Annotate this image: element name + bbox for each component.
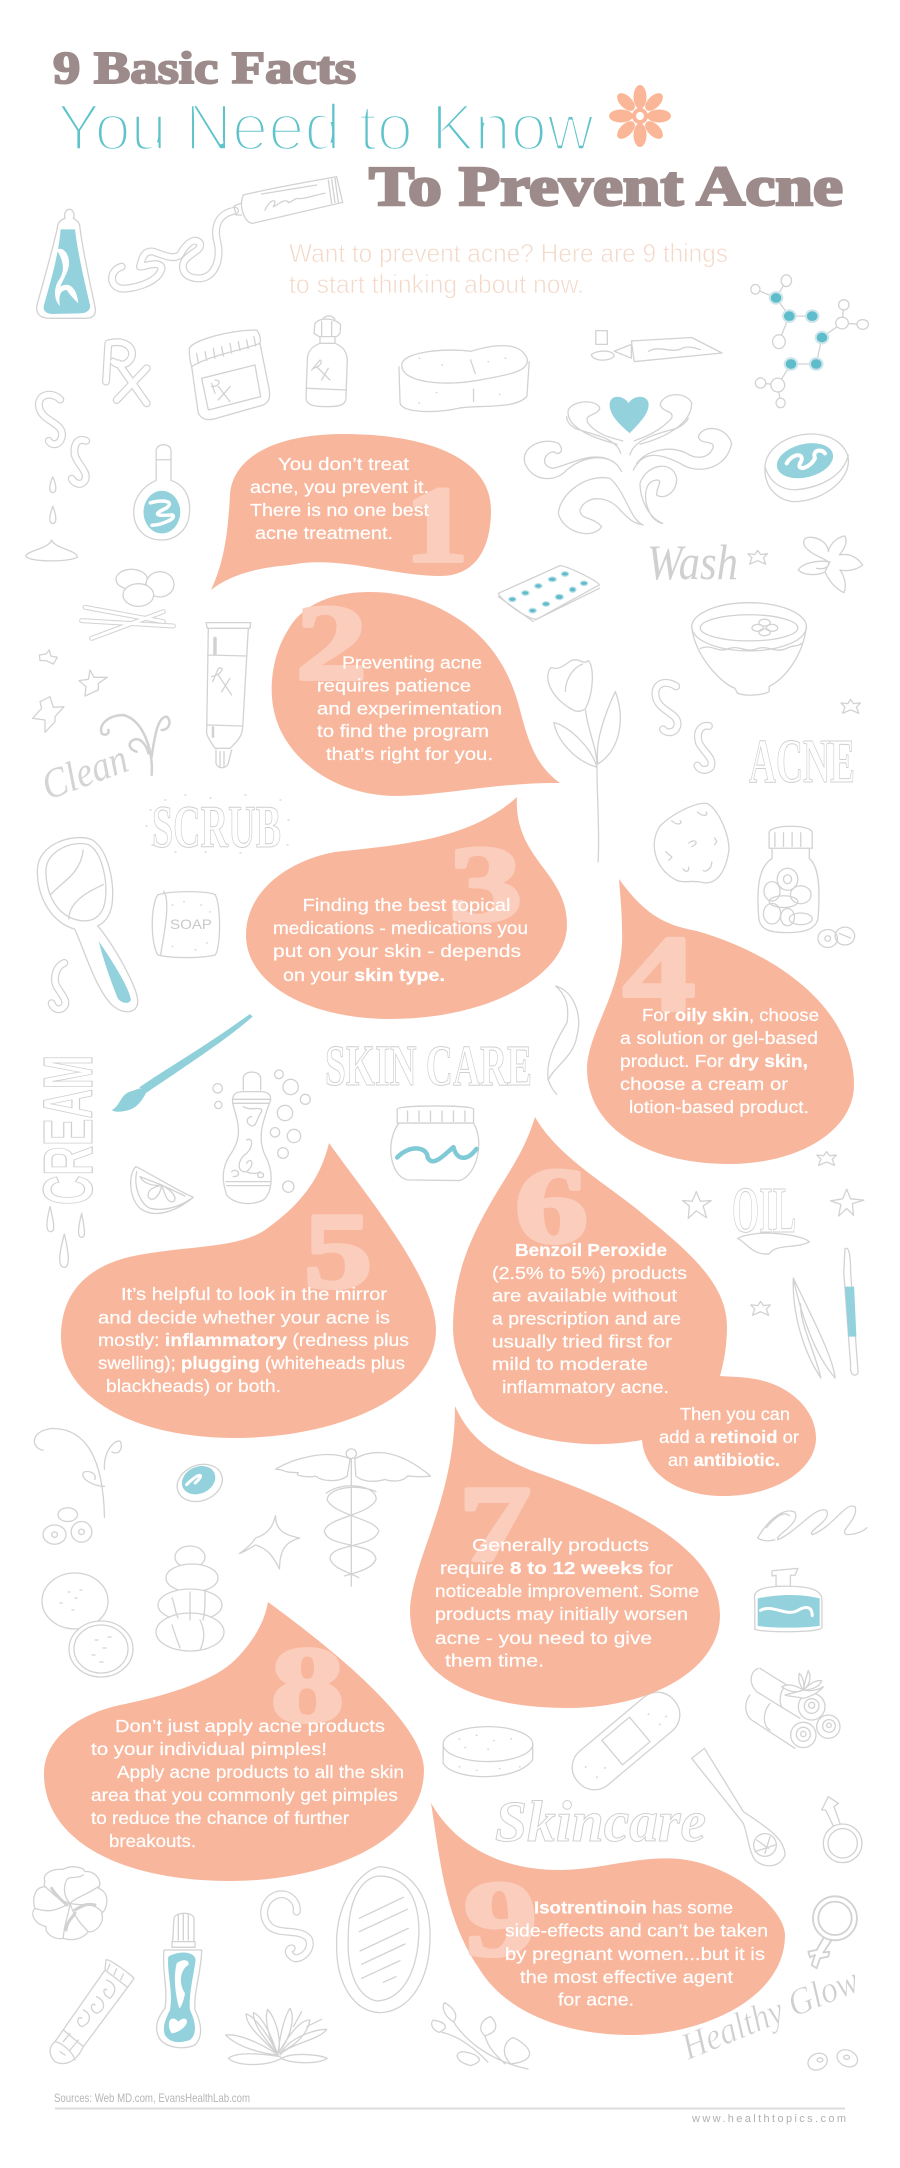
icon: right S letters [655,683,712,770]
icon: drip puddle [26,540,77,561]
bubble 8: to your individual pimples! [91,1739,327,1759]
bubble 6: usually tried first for [492,1332,672,1352]
bubble 2: that’s right for you. [326,744,493,764]
bubble 5: mostly: inflammatory (redness plus [98,1330,409,1350]
icon: squeezed tube [112,177,343,289]
icon: male symbol [822,1797,862,1863]
bubble 7: require 8 to 12 weeks for [440,1558,673,1578]
icon: small tube [591,331,722,362]
bubble 2: Preventing acne [342,652,482,672]
bubble 3: put on your skin - depends [273,941,521,961]
bubble 7: products may initially worsen [435,1604,688,1624]
bubble 6: are available without [492,1286,677,1306]
bubble 7: them time. [445,1650,544,1670]
icon: dropper bottle [213,1070,310,1204]
bubble 2: 2 [296,584,367,703]
icon: cucumber slices [42,1573,133,1677]
bubble 6: mild to moderate [492,1354,648,1374]
icon: orchid [798,536,863,593]
icon: potion bottle [134,445,190,540]
bubble 4 [587,879,854,1164]
intro text: to start thinking about now. [289,269,584,299]
icon: blue soap [765,434,848,502]
icon: cotton balls [116,569,174,606]
bubble 4: lotion-based product. [629,1097,809,1117]
bubble 1: acne treatment. [255,523,393,543]
icon: caduceus [276,1449,430,1586]
icon: SCRUB word: SCRUB [152,794,281,860]
bubble 9: Isotrentinoin has some [534,1898,733,1918]
icon: soap bar: SOAP [170,916,212,932]
icon: sponge [399,346,529,412]
bubble 8 [44,1602,424,1881]
icon: lower left S [52,963,65,1009]
bubble 2 [272,584,560,796]
icon: leaf [548,986,579,1094]
icon: Healthy Glow word: Healthy Glow [675,1959,865,2069]
bubble 1: acne, you prevent it. [250,477,429,497]
icon: molecule [751,275,868,408]
icon: rosette [33,1867,107,1940]
bubble 6: Benzoil Peroxide [515,1240,667,1260]
icon: blue paintbrush [112,1014,253,1112]
icon: blister pack [498,566,599,622]
bubble 5: It’s helpful to look in the mirror [121,1284,387,1304]
bubble 3: Finding the best topical [302,895,510,915]
bubble 5: 5 [304,1192,372,1311]
bubble 4: a solution or gel-based [620,1028,818,1048]
title line 2: You Need to Know [57,90,594,164]
icon: small stars right [748,550,860,713]
icon: Clean word: Clean [36,736,134,809]
bubble 4: 4 [623,915,695,1034]
bubble 4: product. For dry skin, [620,1051,808,1071]
icon: band-aid [564,1684,688,1798]
bubble 5: blackheads) or both. [106,1376,281,1396]
icon: soap bar [152,891,220,958]
icon: pill bottle [758,826,819,933]
bubble 1: 1 [405,466,468,585]
icon: left S letters and drops [39,395,86,523]
bubble 6: Then you can [680,1404,790,1424]
icon: Clean word [36,715,169,809]
icon: small pills left [43,1508,92,1544]
icon: OIL word [732,1174,809,1254]
icon: two pills [818,927,855,947]
icon: Wash word: Wash [647,534,738,590]
icon: bowl with flower [692,603,806,695]
bubble 6: 6 [515,1147,588,1266]
icon: spoon [692,1748,785,1866]
icon: hand mirror [37,838,138,1012]
bubble 8: Don’t just apply acne products [115,1716,385,1736]
bubble 8: 8 [271,1626,344,1745]
bubble 3: 3 [449,825,522,944]
bubble 4: choose a cream or [620,1074,788,1094]
title line 3: To Prevent Acne [369,156,843,218]
icon: Rx jar [189,330,270,420]
bubble 8: to reduce the chance of further [91,1808,349,1828]
bubble 2: and experimentation [317,698,502,718]
bubble 6: an antibiotic. [668,1450,780,1470]
bubble 8: Apply acne products to all the skin [117,1762,404,1782]
icon: soap dispenser [754,1568,822,1632]
icon: female symbol [808,1896,857,1968]
icon: ornate tube [50,1960,134,2064]
icon: blue tube bottle [157,1913,202,2048]
icon: Rx tube [206,623,251,768]
icon: four point star [239,1516,300,1569]
bubble 7 [410,1406,720,1708]
bubble 6: inflammatory acne. [502,1377,669,1397]
icon: SKIN CARE word: SKIN CARE [325,1033,532,1098]
bubble 3 [246,797,567,1019]
icon: bottom pills [805,2047,860,2073]
bubble 1: You don’t treat [278,454,409,474]
icon: blue swirl jar [391,1106,479,1181]
icon: round sponge [443,1727,533,1777]
bubble 3: medications - medications you [273,918,528,938]
bubble 8: breakouts. [109,1831,196,1851]
bubble 5: swelling); plugging (whiteheads plus [98,1353,405,1373]
icon: lotus [226,2008,327,2065]
icon: small blue soap [171,1461,229,1505]
icon: oval mirror [337,1867,430,2013]
bubble 8: area that you commonly get pimples [91,1785,398,1805]
bubble 9: by pregnant women...but it is [505,1944,765,1964]
icon: curl left [34,1429,121,1517]
sources text: Sources: Web MD.com, EvansHealthLab.com [54,2091,250,2105]
icon: blue bottle [37,209,95,318]
icon: stars left [33,650,107,732]
bubble 9: 9 [464,1860,537,1979]
icon: Skincare word: Skincare [495,1789,706,1854]
icon: SCRUB word [146,794,289,860]
icon: lemon slice [131,1167,193,1213]
icon: stacked stones [156,1546,224,1651]
bubble 6: (2.5% to 5%) products [492,1263,687,1283]
icon: lower S [264,1894,310,1958]
icon: right stars [682,1152,864,1315]
bubble 1: There is no one best [250,500,429,520]
bubble 9 [431,1803,785,2035]
icon: tweezers and tool [793,1248,858,1378]
icon: rolled towels [746,1668,840,1748]
bubble 7: Generally products [472,1535,649,1555]
bubble 2: to find the program [317,721,489,741]
bubble 9: side-effects and can’t be taken [505,1920,768,1940]
bubble 7: 7 [459,1465,531,1584]
bubble 6 [453,1117,816,1496]
bubble 6: a prescription and are [492,1308,681,1328]
intro text [289,238,728,299]
icon: cream drips [47,1207,84,1267]
icon: CREAM word: CREAM [29,1055,107,1205]
bubble 1 [211,434,491,590]
bubble 5 [61,1143,436,1438]
bubble 2: requires patience [317,676,471,696]
bubble 4: For oily skin, choose [642,1005,819,1025]
website: www.healthtopics.com [691,2113,846,2125]
icon: heart ornament [524,395,732,534]
icon: rock [654,803,729,883]
intro text: Want to prevent acne? Here are 9 things [289,238,728,268]
icon: tulip [548,660,620,862]
icon: Rx bottle [306,316,347,407]
icon: Rx letters [106,342,147,403]
bubble 3: on your skin type. [283,965,445,985]
bubble 9: the most effective agent [520,1967,733,1987]
bubble 7: noticeable improvement. Some [435,1581,699,1601]
bubble 9: for acne. [558,1990,634,2010]
icon: cotton swabs [82,607,173,638]
icon: OIL word: OIL [732,1174,796,1247]
icon: flower twig [432,2003,530,2069]
bubble 7: acne - you need to give [435,1628,652,1648]
bubble 6: add a retinoid or [659,1427,799,1447]
icon: squiggle [758,1506,867,1541]
bubble 5: and decide whether your acne is [98,1308,390,1328]
icon: flower [609,85,671,147]
title line 1: 9 Basic Facts [53,42,356,93]
